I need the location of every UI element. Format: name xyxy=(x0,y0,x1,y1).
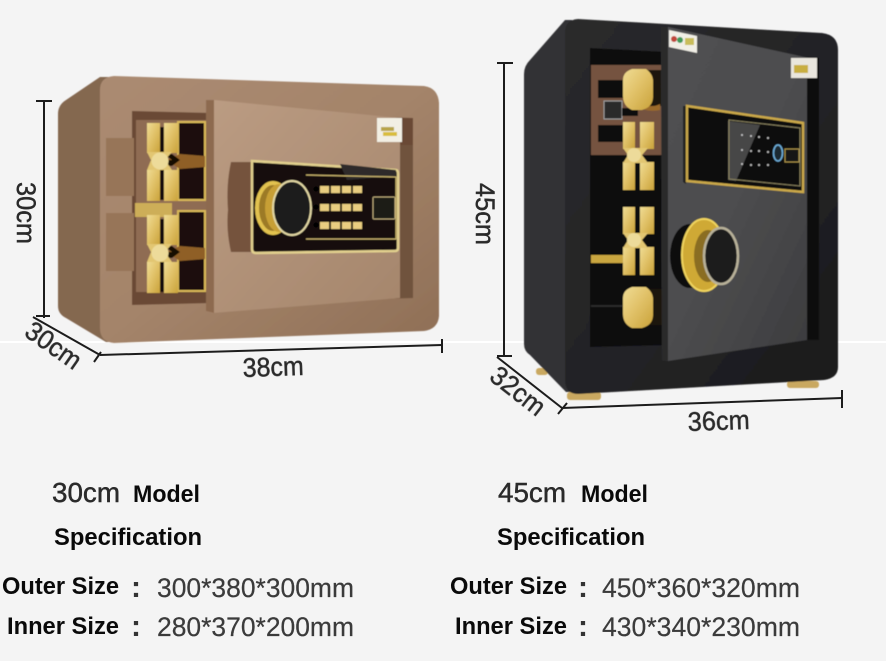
open door xyxy=(206,100,400,313)
inner size row: : xyxy=(578,610,588,643)
keypad buttons xyxy=(314,186,362,229)
safe side panel xyxy=(58,77,112,342)
safe opening xyxy=(106,111,413,305)
label: height 45cm: 45cm xyxy=(470,183,500,245)
electronic panel xyxy=(683,106,803,192)
specification: 45cm model xyxy=(450,477,800,643)
dimensions: 45cm safe xyxy=(497,63,842,414)
outer size row: 450*360*320mm xyxy=(602,573,800,603)
fingerprint sensor xyxy=(774,145,782,161)
outer size row: : xyxy=(131,571,141,604)
black safe interior xyxy=(590,48,819,347)
heading: 45cm Model: Model xyxy=(581,481,648,508)
certification sticker xyxy=(669,30,697,53)
brand sticker black safe xyxy=(791,58,817,78)
inner size row: : xyxy=(131,610,141,643)
dimensions: 30cm safe xyxy=(33,101,442,362)
gold lock bolts xyxy=(135,122,205,293)
panel: 45cm black safe xyxy=(524,19,838,400)
inner size row: 280*370*200mm xyxy=(157,612,354,642)
outer size row: : xyxy=(578,571,588,604)
keypad dial xyxy=(257,181,311,235)
black safe door xyxy=(661,27,818,361)
black safe gold hinges xyxy=(623,69,662,328)
inner size row xyxy=(7,610,354,643)
touch keys xyxy=(741,134,769,166)
label: height 30cm: 30cm xyxy=(11,182,41,244)
outer size row: Outer Size xyxy=(2,573,119,600)
inner size row: Inner Size xyxy=(455,613,567,640)
label: depth 30cm: 30cm xyxy=(20,315,88,375)
mechanical dial xyxy=(670,219,738,291)
safe front frame xyxy=(100,76,439,343)
black safe side panel xyxy=(524,20,572,392)
keypad badge xyxy=(373,197,395,219)
panel: 30cm brown safe xyxy=(58,76,439,343)
feet xyxy=(536,368,819,400)
label: depth 32cm: 32cm xyxy=(484,360,552,422)
black safe front frame xyxy=(565,19,838,394)
inner size row: Inner Size xyxy=(7,613,119,640)
specification: 30cm model xyxy=(2,477,354,643)
label: width 36cm: 36cm xyxy=(687,405,750,437)
heading: 30cm Model: 30cm xyxy=(52,477,120,508)
heading: 45cm Model xyxy=(498,477,648,508)
outer size row: Outer Size xyxy=(450,573,567,600)
heading: 45cm Model: 45cm xyxy=(498,477,566,508)
subheading: specification: Specification xyxy=(497,524,645,551)
label: width 38cm: 38cm xyxy=(242,351,304,383)
outer size row: 300*380*300mm xyxy=(157,573,354,603)
subheading: specification: Specification xyxy=(54,524,202,551)
heading: 30cm Model xyxy=(52,477,200,508)
brand sticker xyxy=(377,118,402,142)
inner size row: 430*340*230mm xyxy=(602,612,800,642)
outer size row xyxy=(450,571,800,604)
inner size row xyxy=(455,610,800,643)
outer size row xyxy=(2,571,354,604)
keypad panel xyxy=(227,161,398,253)
heading: 30cm Model: Model xyxy=(133,481,200,508)
